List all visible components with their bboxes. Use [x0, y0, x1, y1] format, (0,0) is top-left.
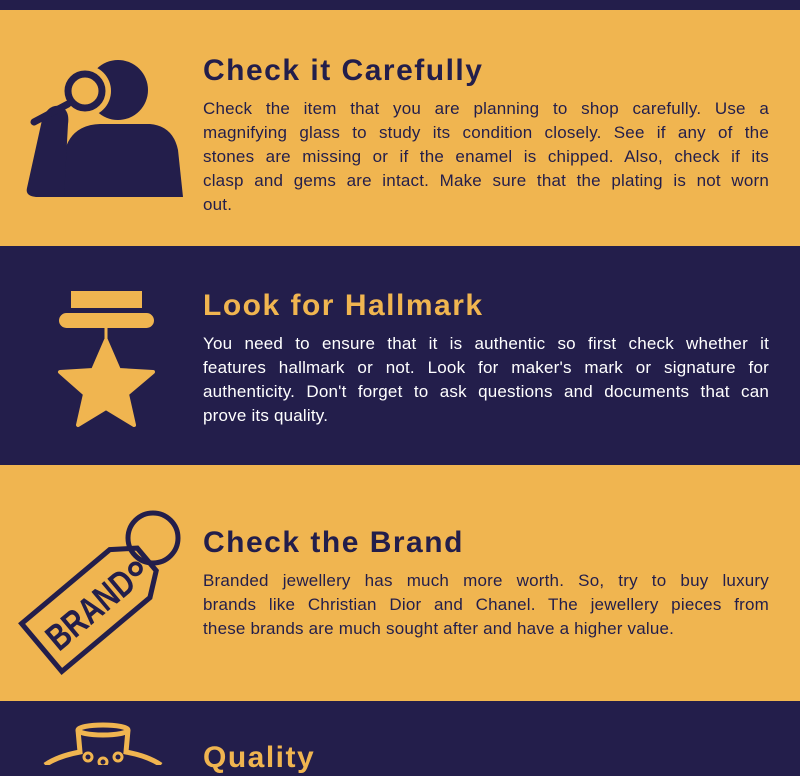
text block: Check the item that you are planning to shop carefully. Use a: [203, 99, 769, 118]
icon: brand tag: BRAND: [38, 561, 143, 658]
text block: magnifying glass to study its condition closely. See if any of the: [203, 123, 769, 142]
panel: check the brand: [0, 465, 800, 701]
text block: brands like Christian Dior and Chanel. The jewellery pieces from: [203, 595, 769, 614]
panel: look for hallmark: [0, 246, 800, 465]
text block: out.: [203, 195, 232, 214]
text block: authenticity. Don't forget to ask questions and documents that can: [203, 382, 769, 401]
heading: Look for Hallmark: [203, 289, 484, 322]
text block: [203, 99, 769, 214]
text block: prove its quality.: [203, 406, 328, 425]
icon: brand tag: [18, 510, 180, 675]
text block: [203, 334, 769, 425]
text block: these brands are much sought after and have a higher value.: [203, 619, 674, 638]
text block: stones are missing or if the enamel is chipped. Also, check if its: [203, 147, 769, 166]
text block: features hallmark or not. Look for maker's mark or signature for: [203, 358, 769, 377]
heading: Check it Carefully: [203, 54, 483, 87]
heading: Quality: [203, 741, 315, 774]
text block: [203, 571, 769, 638]
icon: necklace bust: [44, 722, 162, 765]
text block: You need to ensure that it is authentic so first check whether it: [203, 334, 769, 353]
text block: Branded jewellery has much more worth. So, try to buy luxury: [203, 571, 769, 590]
panel: check it carefully: [0, 10, 800, 246]
text block: clasp and gems are intact. Make sure that the plating is not worn: [203, 171, 769, 190]
panel: quality: [0, 701, 800, 765]
heading: Check the Brand: [203, 526, 464, 559]
icon: medal star: [58, 291, 155, 428]
icon: person with magnifier: [26, 60, 183, 197]
